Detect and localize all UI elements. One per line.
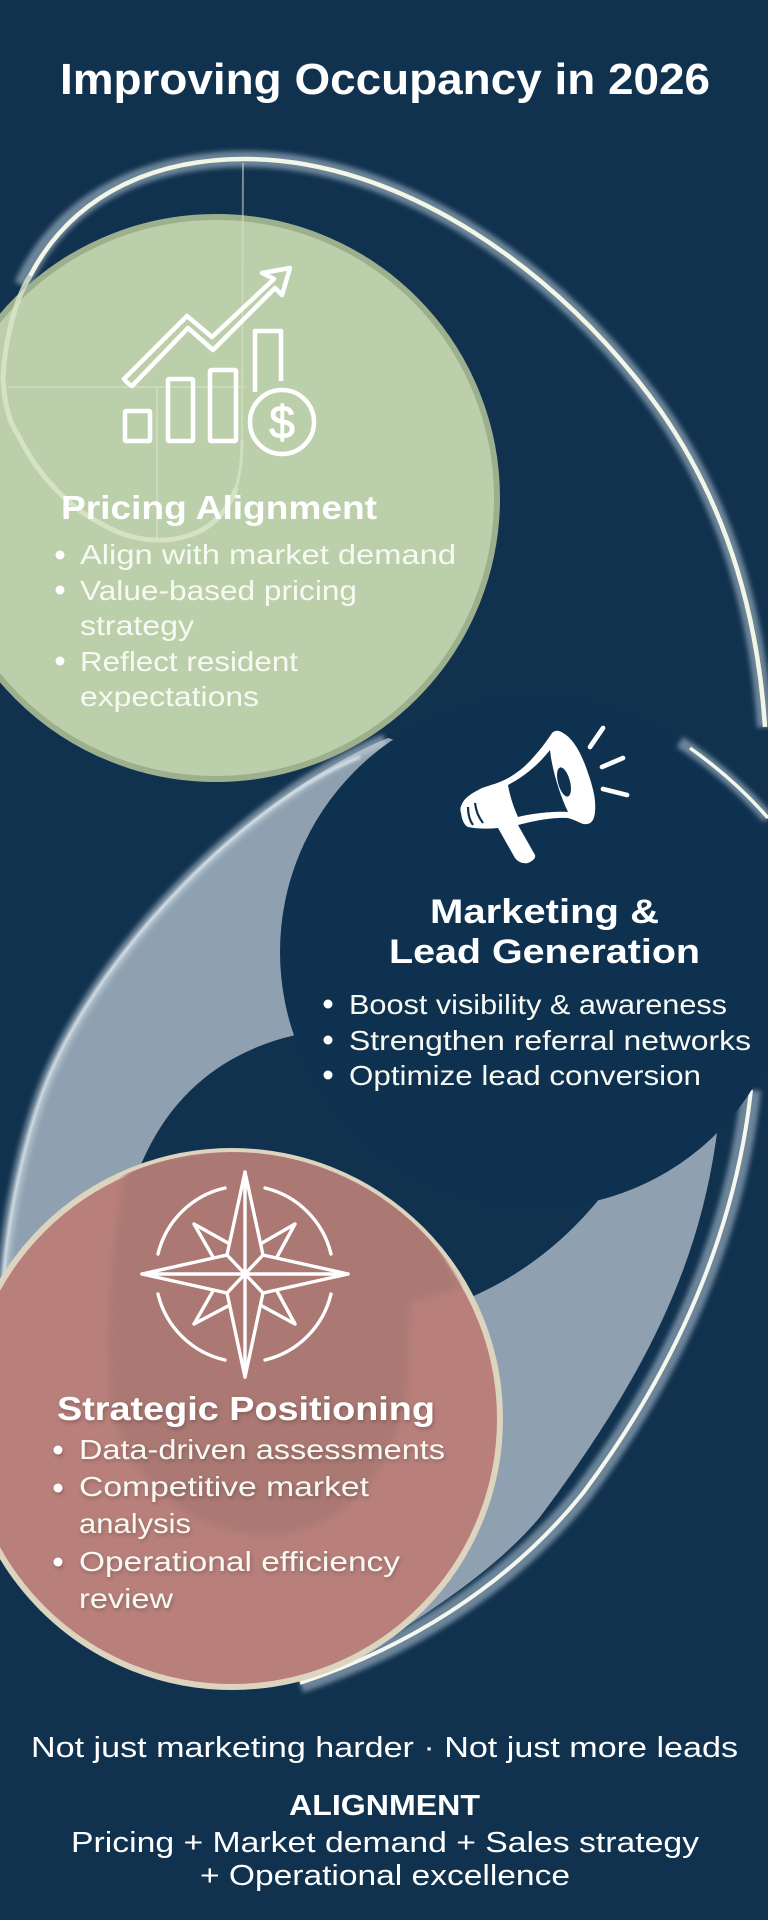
heading: marketing: Marketing &	[430, 893, 659, 931]
list: strategic points: Data-driven assessments	[79, 1434, 445, 1465]
swirl inner hole	[135, 1000, 600, 1330]
heading: strategic positioning: Strategic Positioning	[57, 1390, 435, 1427]
footer alignment summary: Pricing + Market demand + Sales strategy	[71, 1827, 700, 1859]
icon: rising chart with dollar coin	[124, 268, 314, 454]
list: marketing points: Boost visibility & awareness	[349, 989, 727, 1020]
title: Improving Occupancy in 2026	[60, 55, 710, 104]
footer tagline: Not just marketing harder · Not just more leads	[31, 1732, 738, 1764]
list: strategic points: review	[79, 1583, 174, 1614]
list: pricing points: Align with market demand	[80, 539, 456, 570]
icon: rising chart with dollar coin: $	[269, 396, 295, 448]
panel: strategic positioning	[0, 1130, 500, 1687]
panel: pricing alignment	[0, 163, 497, 779]
list: pricing points: Reflect resident	[80, 646, 298, 677]
footer alignment summary	[71, 1790, 700, 1892]
list: marketing points: Optimize lead conversion	[349, 1060, 701, 1091]
swirl left edge highlight	[2, 740, 385, 1290]
list: marketing points	[324, 989, 751, 1091]
ghost ring lines	[3, 163, 245, 540]
green circle	[0, 217, 497, 779]
heading: marketing: Lead Generation	[389, 933, 700, 971]
icon: megaphone	[460, 728, 627, 863]
list: strategic points	[54, 1434, 445, 1614]
list: pricing points: Value-based pricing	[80, 575, 357, 606]
grey swirl band	[2, 738, 717, 1640]
list: pricing points: strategy	[80, 610, 194, 641]
icon: compass	[142, 1172, 348, 1377]
list: strategic points: analysis	[79, 1508, 191, 1539]
list: pricing points: expectations	[80, 681, 259, 712]
upper white ring arc	[22, 159, 765, 727]
heading: marketing	[389, 893, 700, 971]
list: marketing points: Strengthen referral networks	[349, 1025, 751, 1056]
red circle	[0, 1151, 500, 1687]
arc along circle edge	[680, 742, 768, 818]
list: pricing points	[56, 539, 456, 712]
list: strategic points: Competitive market	[79, 1471, 369, 1502]
footer alignment summary: + Operational excellence	[200, 1860, 570, 1892]
heading: pricing alignment: Pricing Alignment	[61, 489, 377, 526]
navy circle	[280, 696, 768, 1208]
list: strategic points: Operational efficiency	[79, 1546, 400, 1577]
lower white ring arc	[300, 1090, 751, 1683]
footer alignment summary: ALIGNMENT	[289, 1790, 480, 1822]
panel: marketing and lead generation	[280, 696, 768, 1208]
ghost darker patch	[108, 1130, 460, 1535]
